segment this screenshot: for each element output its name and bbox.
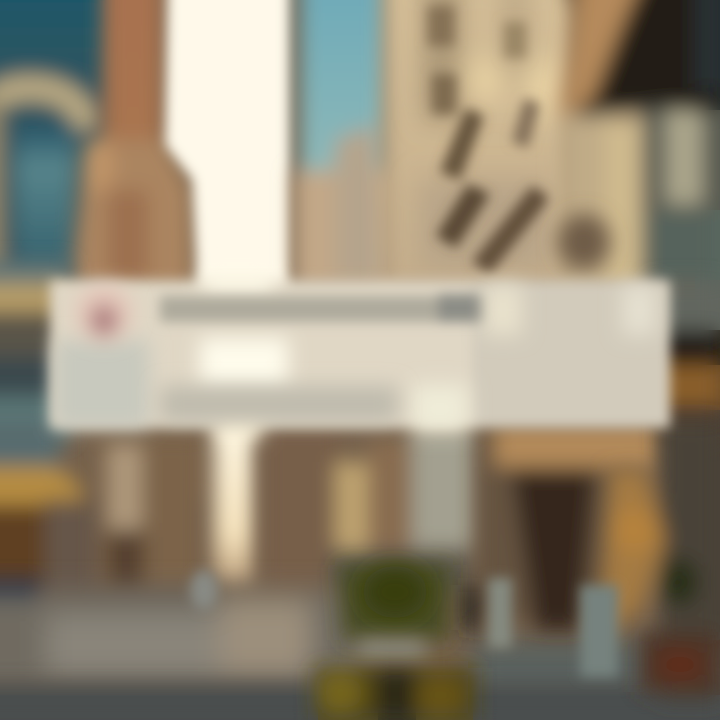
bottom road xyxy=(0,684,720,720)
side strips beside panel xyxy=(0,262,720,440)
icon: dark window blob xyxy=(558,214,610,270)
left side strip xyxy=(0,262,70,440)
blue sky and distant tower xyxy=(294,0,394,290)
right dark pillar xyxy=(462,425,660,630)
upper right buildings xyxy=(558,0,720,292)
upper left building xyxy=(0,0,110,300)
overlay panel xyxy=(50,272,670,438)
brown tower xyxy=(70,0,192,290)
lower street scene xyxy=(0,415,720,720)
right side strip xyxy=(650,280,720,440)
left columns xyxy=(98,435,203,590)
central planter xyxy=(315,565,475,720)
right orange column and dark wall xyxy=(598,420,720,700)
centre buildings xyxy=(262,425,474,590)
yellow pots xyxy=(315,668,475,720)
plant foliage xyxy=(338,565,450,640)
tan building with slanted windows xyxy=(384,0,574,290)
body text bar xyxy=(160,386,398,422)
plant base xyxy=(358,640,426,660)
ground xyxy=(0,590,720,700)
left awning and storefront xyxy=(0,425,205,642)
small pale blob xyxy=(190,570,218,610)
icon: dark windows xyxy=(428,6,550,274)
panel background xyxy=(50,280,670,428)
light patches xyxy=(200,272,656,438)
pale column bases xyxy=(488,578,618,677)
street light glow xyxy=(214,415,254,585)
bright sky gap xyxy=(165,0,290,300)
panel left tint xyxy=(54,340,149,428)
heading bar xyxy=(160,294,482,322)
icon: pink badge xyxy=(76,284,132,340)
building shading xyxy=(420,0,556,270)
